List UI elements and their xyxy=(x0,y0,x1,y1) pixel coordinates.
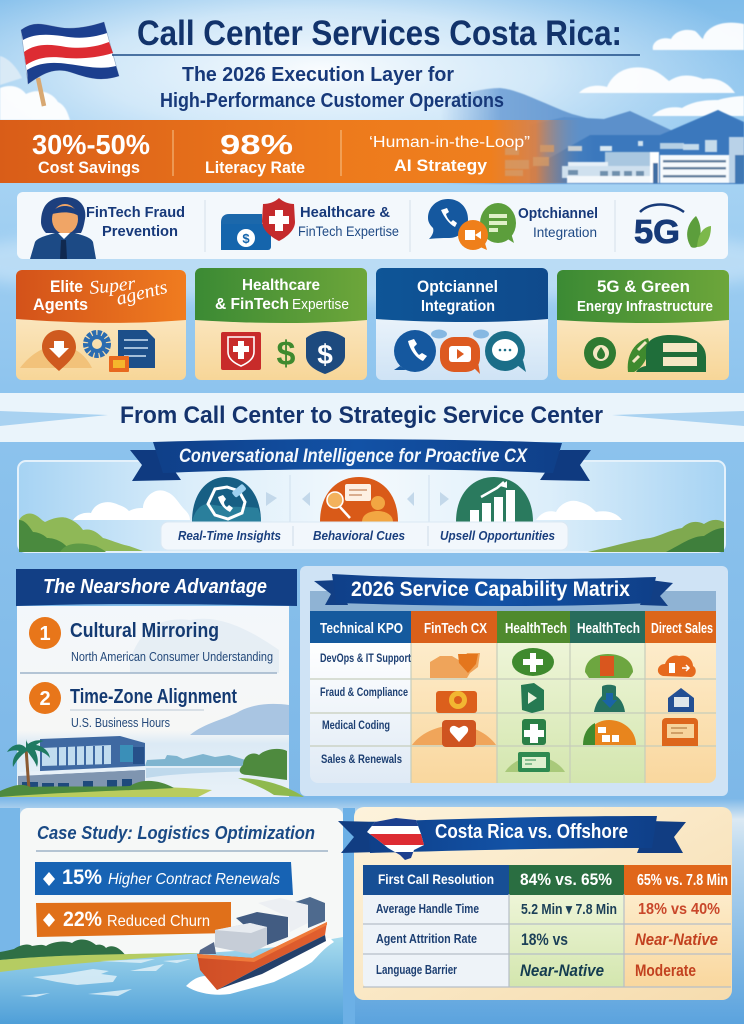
stat: reduced churn: 22% xyxy=(63,908,102,931)
icon: 5G and leaf xyxy=(634,204,711,250)
row: language barrier xyxy=(376,961,696,980)
row: average handle time: 18% vs 40% xyxy=(638,901,720,918)
table body columns xyxy=(310,643,716,783)
stat: literacy rate: Literacy Rate xyxy=(205,158,305,177)
row labels: DevOps & IT Support xyxy=(320,651,411,665)
stat: reduced churn: Reduced Churn xyxy=(107,913,210,930)
table header: HealthTech xyxy=(577,620,640,637)
subtitle: High-Performance Customer Operations xyxy=(160,90,504,112)
stat: literacy rate xyxy=(205,129,305,177)
ribbon: Conversational Intelligence xyxy=(130,439,591,481)
stat: contract renewals: Higher Contract Renewals xyxy=(108,871,280,888)
label: Optchiannel Integration: Integration xyxy=(533,224,597,240)
heading: agents xyxy=(114,277,170,310)
icon: agent xyxy=(30,197,96,259)
subtitle: The 2026 Execution Layer for xyxy=(182,64,454,86)
row 4 icon xyxy=(505,752,565,772)
card: 5G & Green Energy Infrastructure xyxy=(557,270,729,380)
heading: & FinTech xyxy=(215,296,289,313)
stat: contract renewals: 15% xyxy=(62,866,102,889)
stat: reduced churn xyxy=(36,902,231,937)
stat: contract renewals xyxy=(35,862,293,895)
subtitle xyxy=(160,64,504,112)
ribbon: Costa Rica vs. Offshore xyxy=(435,821,628,843)
mountains xyxy=(440,88,744,184)
cell icons xyxy=(412,648,698,772)
item: Time-Zone Alignment: U.S. Business Hours xyxy=(71,715,170,730)
row: language barrier: Near-Native xyxy=(520,961,604,980)
water foam xyxy=(20,959,191,997)
clouds top xyxy=(0,23,744,120)
row: agent attrition rate: 18% vs xyxy=(521,930,568,949)
label: FinTech Fraud Prevention: Prevention xyxy=(102,223,178,240)
row labels: Fraud & Compliance xyxy=(320,685,408,699)
heading: Integration xyxy=(421,298,495,315)
icon: upsell opportunities xyxy=(456,477,533,522)
section band: From Call Center to Strategic Service Center xyxy=(0,393,744,442)
row labels: Sales & Renewals xyxy=(321,752,402,766)
heading: Agents xyxy=(33,295,88,314)
icons xyxy=(20,330,155,372)
panel: Costa Rica vs. Offshore xyxy=(338,807,732,1000)
item: Time-Zone Alignment xyxy=(29,682,237,730)
item: Time-Zone Alignment: 2 xyxy=(39,688,51,710)
title: Call Center Services Costa Rica: xyxy=(137,14,622,53)
row: agent attrition rate: Agent Attrition Rate xyxy=(376,931,477,946)
icon: cargo ship xyxy=(186,897,334,995)
icon: 5G and leaf: 5G xyxy=(634,213,680,250)
comparison table xyxy=(363,865,731,987)
icons: $ xyxy=(317,339,333,370)
table header xyxy=(310,611,716,643)
label: Optchiannel Integration: Optchiannel xyxy=(518,205,598,222)
icon: real-time insights xyxy=(192,477,261,522)
icons: $ xyxy=(277,335,296,373)
heading: 5G & Green xyxy=(597,277,690,296)
stat: cost savings xyxy=(32,129,150,177)
stat: AI strategy: ‘Human-in-the-Loop” xyxy=(369,134,530,151)
panel: The Nearshore Advantage xyxy=(0,569,304,797)
header row: First Call Resolution xyxy=(378,871,494,887)
icon: wallet and shield xyxy=(221,198,295,250)
backdrop hills xyxy=(130,619,279,673)
item: Cultural Mirroring: 1 xyxy=(39,623,51,645)
icons xyxy=(394,330,526,374)
panel: conversational intelligence xyxy=(18,461,725,552)
labels strip: Behavioral Cues xyxy=(313,528,405,543)
row: language barrier: Moderate xyxy=(635,961,696,980)
header: The Nearshore Advantage xyxy=(43,576,267,598)
shore xyxy=(0,939,200,972)
item: Cultural Mirroring xyxy=(29,617,273,664)
icons xyxy=(584,335,706,372)
ribbon: matrix title xyxy=(314,574,673,606)
label: Healthcare & FinTech Expertise: Healthcare & xyxy=(300,204,390,221)
heading xyxy=(215,277,349,313)
header xyxy=(16,569,297,606)
icon: hills right xyxy=(588,520,724,552)
heading xyxy=(577,277,713,315)
item: Cultural Mirroring: North American Consumer Understanding xyxy=(71,649,273,664)
scene: office and shore xyxy=(0,736,304,797)
stat: AI strategy xyxy=(369,134,530,175)
heading: Case Study: Logistics Optimization xyxy=(37,823,315,843)
row: average handle time: Average Handle Time xyxy=(376,901,479,916)
row labels xyxy=(320,651,411,766)
heading: Energy Infrastructure xyxy=(577,298,713,315)
row: average handle time xyxy=(376,901,720,918)
table header: HealthTech xyxy=(505,620,567,637)
icon: hills left xyxy=(19,513,143,552)
item: Time-Zone Alignment: Time-Zone Alignment xyxy=(70,686,237,708)
stat: AI strategy: AI Strategy xyxy=(394,156,488,175)
row 2 icons xyxy=(436,683,694,713)
clouds xyxy=(73,490,658,520)
row 1 icons xyxy=(430,648,696,678)
water xyxy=(0,937,343,1024)
row 3 icons xyxy=(412,718,698,747)
stats band xyxy=(0,120,744,183)
labels strip: Upsell Opportunities xyxy=(440,528,555,543)
panel: Case Study xyxy=(0,808,355,1024)
row: agent attrition rate: Near-Native xyxy=(635,930,718,949)
label: FinTech Fraud Prevention: FinTech Fraud xyxy=(86,204,185,221)
card: Healthcare & FinTech Expertise xyxy=(195,268,367,380)
heading xyxy=(417,277,498,315)
table header: Technical KPO xyxy=(320,620,403,637)
card: Elite Agents xyxy=(16,270,186,380)
labels strip: Real-Time Insights xyxy=(178,528,281,543)
table header: Direct Sales xyxy=(651,620,713,637)
icon: Costa Rica flag xyxy=(21,22,119,106)
heading xyxy=(33,273,170,314)
heading: Elite xyxy=(50,277,83,296)
label: FinTech Fraud Prevention xyxy=(86,204,185,240)
section band: From Call Center to Strategic Service Center: From Call Center to Strategic Service Center xyxy=(120,402,603,429)
city buildings xyxy=(505,137,744,183)
panel: 2026 Service Capability Matrix xyxy=(300,566,728,796)
item: Cultural Mirroring: Cultural Mirroring xyxy=(70,620,219,642)
labels strip xyxy=(161,522,568,550)
row: average handle time: 5.2 Min ▾ 7.8 Min xyxy=(521,901,617,918)
icon: map xyxy=(367,818,424,860)
label: Healthcare & FinTech Expertise xyxy=(298,204,399,239)
row labels: Medical Coding xyxy=(322,718,390,732)
table header: FinTech CX xyxy=(424,620,487,637)
stat: cost savings: 30%-50% xyxy=(32,129,150,160)
heading: Super xyxy=(88,273,137,299)
icon: omnichannel bubbles xyxy=(428,199,516,250)
ribbon: Conversational Intelligence: Conversational Intelligence for Proactive CX xyxy=(179,446,528,467)
panel: feature strip xyxy=(17,192,728,259)
heading: Expertise xyxy=(292,296,349,313)
icon: wallet and shield: $ xyxy=(242,231,250,246)
stat: literacy rate: 98% xyxy=(220,129,293,160)
header row xyxy=(378,870,728,889)
ribbon: matrix title: 2026 Service Capability Matrix xyxy=(351,578,630,601)
label: Optchiannel Integration xyxy=(518,205,598,240)
stat: cost savings: Cost Savings xyxy=(38,158,140,177)
icon: behavioral cues xyxy=(320,477,398,522)
heading: Optciannel xyxy=(417,277,498,296)
row: language barrier: Language Barrier xyxy=(376,962,457,977)
label: Healthcare & FinTech Expertise: FinTech Expertise xyxy=(298,223,399,239)
icons xyxy=(221,331,345,374)
ribbon xyxy=(338,815,686,863)
card: Optciannel Integration xyxy=(376,268,548,380)
row: agent attrition rate xyxy=(376,930,718,949)
heading: Healthcare xyxy=(242,277,320,294)
header row: 84% vs. 65% xyxy=(520,870,612,889)
